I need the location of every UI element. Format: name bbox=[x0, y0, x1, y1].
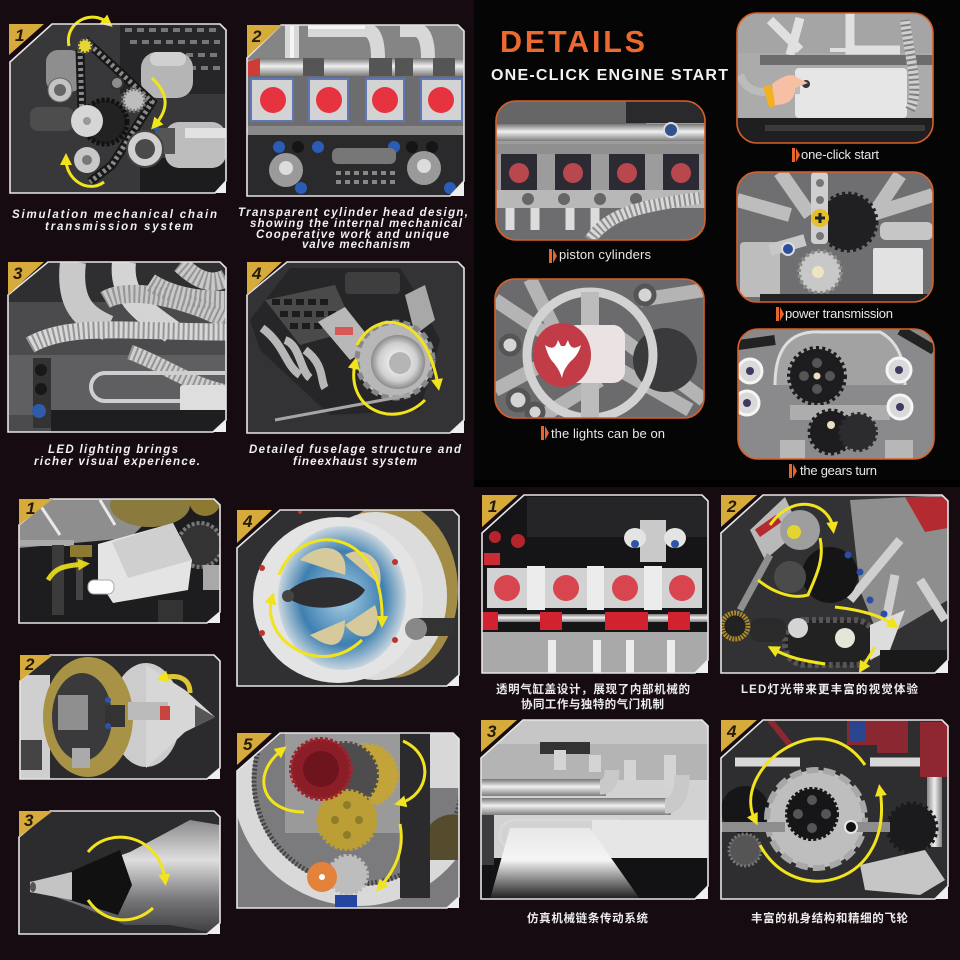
badge: 2 bbox=[24, 655, 35, 674]
captions: top left: LED lighting brings bbox=[48, 444, 178, 456]
panel: piston cylinders bbox=[496, 101, 705, 240]
panel 4: fuselage and flywheel bbox=[247, 262, 464, 433]
captions: lower right: 协同工作与独特的气门机制 bbox=[521, 697, 664, 711]
icon: arrows bbox=[88, 837, 165, 920]
badge 1 bbox=[9, 24, 44, 55]
captions: lower right bbox=[496, 682, 918, 925]
badge: 4 bbox=[242, 512, 253, 531]
panel: lower left 3 cone bbox=[19, 811, 220, 934]
icon: arrow bbox=[162, 677, 190, 693]
icon: pressing hand bbox=[763, 75, 808, 108]
caption: piston cylinders: piston cylinders bbox=[559, 247, 652, 262]
badge bbox=[482, 495, 518, 527]
icon: arrow bbox=[48, 564, 84, 580]
panel: lights can be on bbox=[495, 279, 704, 420]
badge 1: 1 bbox=[15, 26, 24, 45]
panel: LED exhaust bbox=[481, 720, 708, 899]
badge: 3 bbox=[487, 722, 497, 741]
caption: one-click: one-click start bbox=[801, 147, 879, 162]
badge bbox=[721, 720, 757, 752]
badge 4 bbox=[247, 262, 282, 295]
captions: top left bbox=[12, 207, 468, 468]
captions: top left: Simulation mechanical chain bbox=[12, 209, 217, 221]
icon: rotation arrows bbox=[270, 540, 382, 657]
badge: 5 bbox=[243, 735, 253, 754]
panel: one-click start bbox=[737, 13, 935, 143]
badge 4: 4 bbox=[251, 264, 262, 283]
badge: 3 bbox=[24, 811, 34, 830]
panel: power transmission bbox=[737, 172, 933, 302]
badge bbox=[721, 495, 757, 527]
badge: 1 bbox=[26, 499, 35, 518]
title: DETAILS: DETAILS bbox=[500, 25, 645, 59]
captions: lower right: 透明气缸盖设计，展现了内部机械的 bbox=[496, 682, 690, 696]
captions: top left: Transparent cylinder head design, bbox=[238, 207, 468, 219]
badge 2: 2 bbox=[251, 27, 262, 46]
badge bbox=[19, 811, 53, 837]
icon: arrows bbox=[758, 504, 894, 668]
captions: top left: transmission system bbox=[45, 221, 193, 233]
captions: lower right: 丰富的机身结构和精细的飞轮 bbox=[751, 911, 908, 925]
captions: top left: Cooperative work and unique bbox=[256, 229, 450, 241]
captions: lower right: LED灯光带来更丰富的视觉体验 bbox=[741, 682, 918, 696]
badge 3: 3 bbox=[13, 264, 23, 283]
badge 2 bbox=[247, 25, 282, 57]
captions: top left: richer visual experience. bbox=[34, 456, 200, 468]
badge bbox=[19, 499, 53, 525]
panel: lower left 4 turbine bbox=[237, 502, 459, 686]
captions: top left: showing the internal mechanical bbox=[250, 218, 463, 230]
panel 1: chain transmission bbox=[9, 17, 226, 193]
badge: 1 bbox=[488, 497, 497, 516]
panel: flywheel bbox=[721, 720, 948, 899]
caption: gears: the gears turn bbox=[800, 463, 877, 478]
panel: red cylinders bbox=[482, 495, 708, 673]
panel: lower left 1 motor bbox=[18, 498, 221, 624]
icon: rotation arrows bbox=[66, 17, 165, 186]
badge bbox=[237, 733, 272, 765]
badge bbox=[20, 655, 53, 681]
icon: rotation arrows bbox=[264, 741, 425, 887]
captions: lower right: 仿真机械链条传动系统 bbox=[527, 911, 648, 925]
badge: 4 bbox=[726, 722, 737, 741]
icon: flywheel arrows bbox=[354, 322, 438, 414]
badge bbox=[481, 720, 517, 752]
subtitle: ONE-CLICK ENGINE START bbox=[491, 67, 728, 84]
badge 3 bbox=[8, 262, 44, 295]
caption: lights: the lights can be on bbox=[551, 426, 665, 441]
captions: top left: valve mechanism bbox=[302, 239, 410, 251]
captions: top left: Detailed fuselage structure and bbox=[249, 444, 462, 456]
panel: lower left 2 nose bbox=[20, 655, 220, 779]
panel: lower left 5 gear train bbox=[236, 732, 460, 909]
badge bbox=[237, 510, 272, 543]
badge: 2 bbox=[726, 497, 737, 516]
panel 2: transparent cylinder heads bbox=[247, 25, 464, 196]
caption: power: power transmission bbox=[785, 306, 893, 321]
panel: V-engine timing bbox=[721, 495, 948, 673]
panel: gears turn bbox=[735, 329, 934, 459]
icon: rotation arrows bbox=[751, 739, 882, 881]
captions: top left: fineexhaust system bbox=[293, 456, 417, 468]
panel 3: LED lighting bbox=[8, 262, 226, 432]
